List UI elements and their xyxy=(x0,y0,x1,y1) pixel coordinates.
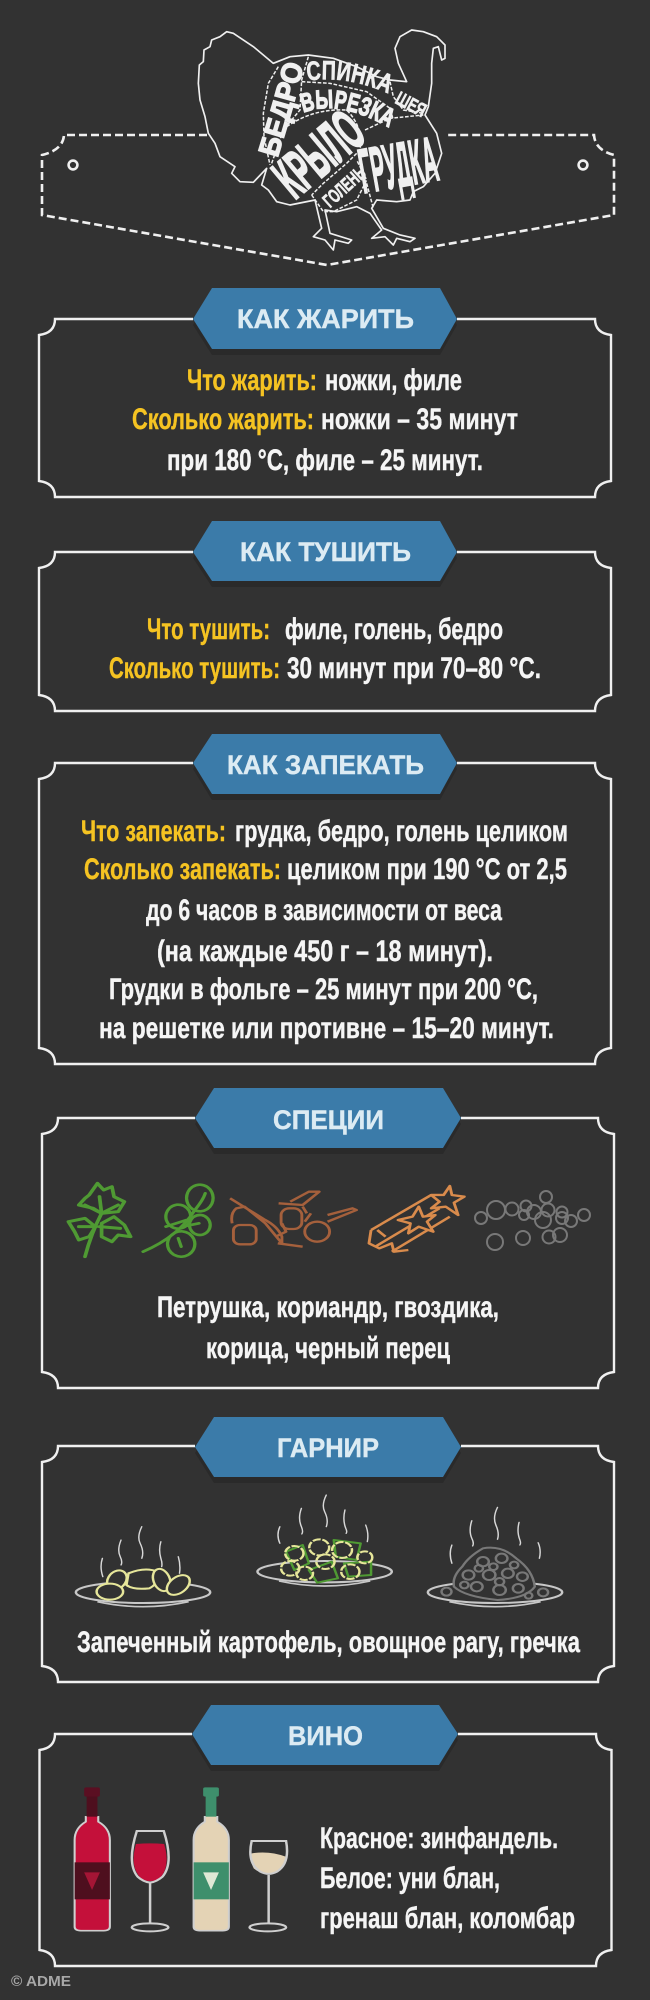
panel text: Что запекать: xyxy=(81,815,226,848)
heading banner xyxy=(193,521,457,581)
panel text: 30 минут при 70–80 °С. xyxy=(287,652,541,685)
panel text xyxy=(132,364,518,477)
icon: buckwheat plate xyxy=(428,1507,562,1607)
icon: white wine bottle xyxy=(194,1787,229,1931)
panel text: Сколько запекать: xyxy=(84,853,281,886)
panel text: (на каждые 450 г – 18 минут). xyxy=(157,935,493,968)
icon: white wine glass xyxy=(250,1841,287,1931)
spice icons xyxy=(68,1183,590,1257)
icon: baked potato plate xyxy=(76,1527,210,1607)
icon: vegetable stew plate xyxy=(257,1495,392,1586)
heading banner xyxy=(192,1705,458,1765)
panel text: Петрушка, кориандр, гвоздика, xyxy=(157,1291,499,1324)
panel text: Сколько жарить: xyxy=(132,403,314,436)
panel text: ножки, филе xyxy=(325,364,462,397)
label: вырезка: ВЫРЕЗКА xyxy=(299,89,394,128)
heading banner: ГАРНИР xyxy=(277,1433,379,1463)
text: ГРУДКА xyxy=(354,125,443,207)
icon: cloves xyxy=(230,1192,357,1247)
icon: cinnamon and star anise xyxy=(369,1186,464,1252)
panel: как запекать xyxy=(39,734,611,1064)
credit: © ADME xyxy=(11,1973,71,1990)
heading banner xyxy=(193,734,457,794)
heading banner: КАК ТУШИТЬ xyxy=(240,537,411,567)
icon: parsley xyxy=(68,1183,131,1257)
panel text xyxy=(157,1291,499,1365)
panel: как тушить xyxy=(39,521,611,711)
illustration: turkey butcher diagram xyxy=(198,29,446,251)
panel text: Белое: уни блан, xyxy=(320,1862,500,1895)
heading banner xyxy=(193,288,457,349)
panel text: до 6 часов в зависимости от веса xyxy=(146,894,502,927)
heading banner: ВИНО xyxy=(288,1721,363,1751)
label: бедро: БЕДРО xyxy=(258,62,303,158)
panel: как жарить xyxy=(39,288,611,497)
icon: red wine glass xyxy=(132,1831,169,1931)
panel text xyxy=(81,815,568,1045)
label: голень: ГОЛЕНЬ xyxy=(319,163,371,212)
header dashed ribbon xyxy=(42,135,614,265)
cut lines xyxy=(263,57,423,212)
heading banner: СПЕЦИИ xyxy=(273,1105,384,1135)
panel text: ножки – 35 минут xyxy=(321,403,518,436)
panel text xyxy=(109,613,541,685)
icon: coriander xyxy=(143,1185,213,1257)
panel text: филе, голень, бедро xyxy=(285,613,503,646)
icon: black pepper xyxy=(475,1191,590,1250)
panel text: Красное: зинфандель. xyxy=(320,1822,558,1855)
panel text: при 180 °С, филе – 25 минут. xyxy=(167,444,483,477)
panel text: Что тушить: xyxy=(147,613,270,646)
wine illustrations xyxy=(75,1787,287,1931)
label: крыло: КРЫЛО xyxy=(261,98,377,210)
side dish illustrations xyxy=(76,1495,562,1607)
panel text xyxy=(320,1822,575,1935)
label: спинка: СПИНКА xyxy=(306,60,390,94)
panel: гарнир xyxy=(42,1417,614,1682)
heading banner xyxy=(195,1417,461,1477)
icon: red wine bottle xyxy=(75,1787,110,1931)
heading banner: КАК ЗАПЕКАТЬ xyxy=(227,750,424,780)
turkey outline xyxy=(198,30,445,250)
panel text: корица, черный перец xyxy=(206,1332,450,1365)
label: шея: ШЕЯ xyxy=(392,89,429,122)
heading banner xyxy=(195,1088,461,1148)
heading banner: КАК ЖАРИТЬ xyxy=(237,304,414,334)
panel text: Что жарить: xyxy=(187,364,317,397)
panel: специи xyxy=(42,1088,614,1388)
panel: вино xyxy=(40,1705,612,1966)
panel text: Сколько тушить: xyxy=(109,652,280,685)
